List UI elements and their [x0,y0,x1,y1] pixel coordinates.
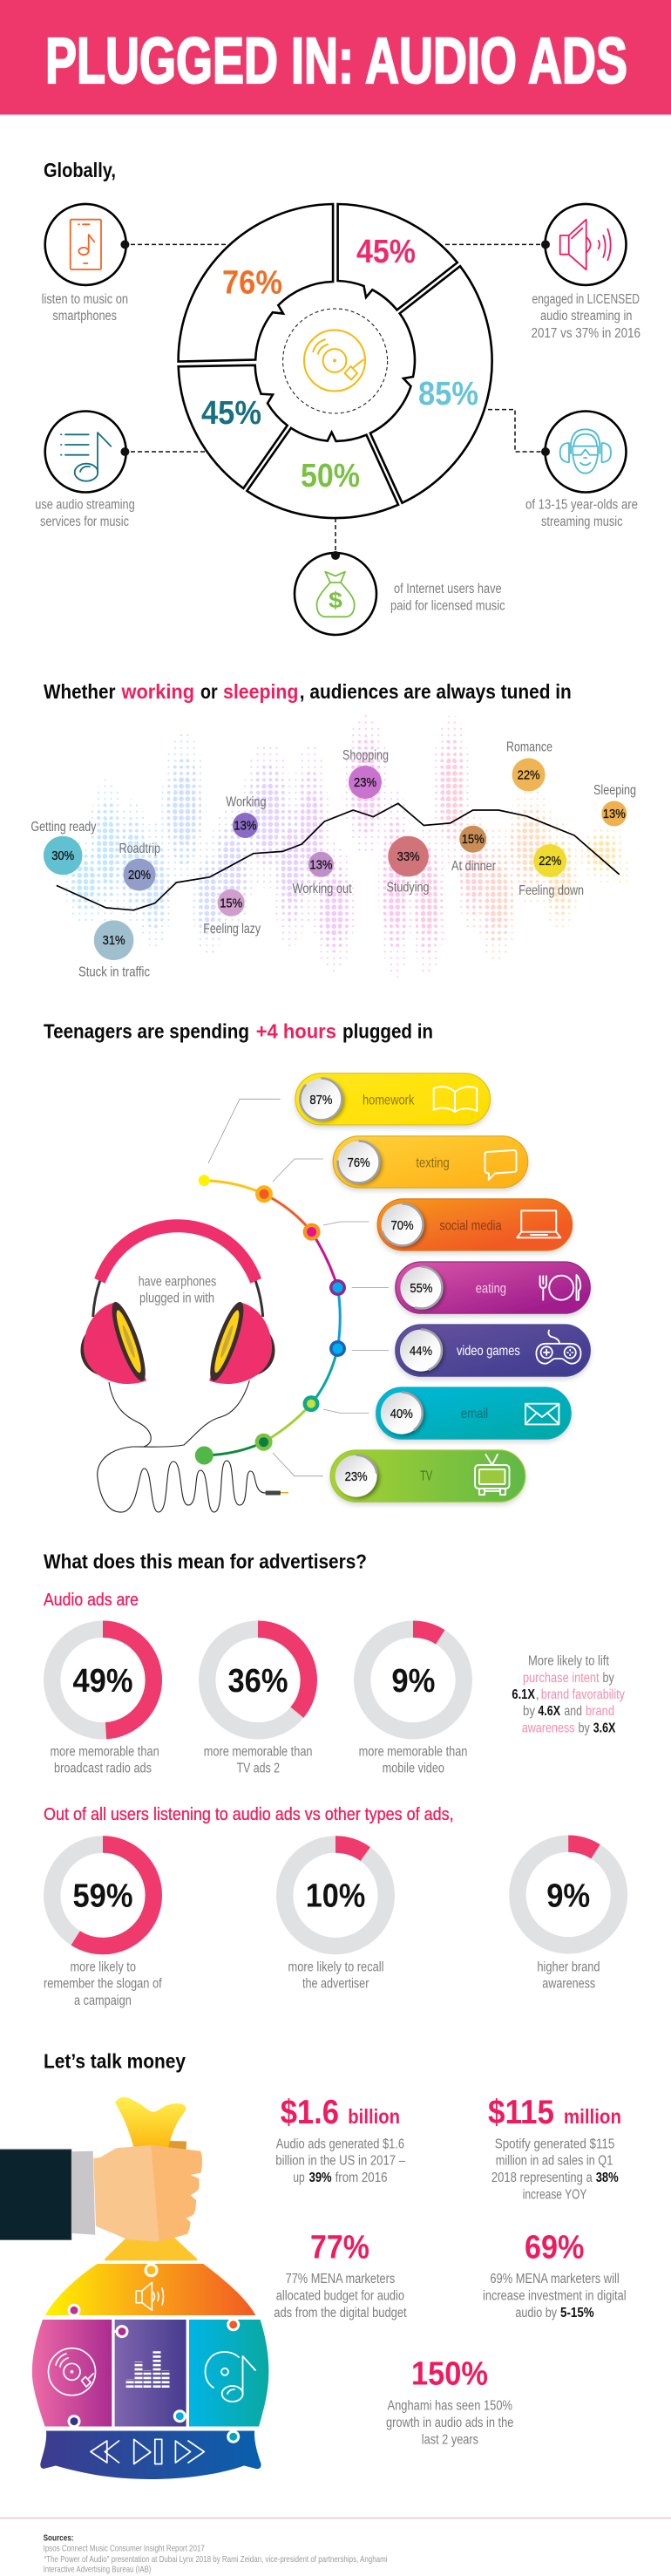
icon: face with headphones [541,412,626,492]
connector lines [131,244,546,555]
icon: speech bubble [485,1150,516,1180]
caption: awareness [542,1977,595,1992]
point: roadtrip 20%: 20% [128,869,151,883]
heading: working or sleeping: Whether [44,680,116,703]
value: 45% pink: 45% [356,234,416,270]
caption: more memorable than [51,1744,159,1759]
point: at dinner 15% [451,826,497,874]
subheading: out of all users: Out of all users listening to audio ads vs other types of ads, [44,1804,454,1824]
caption [537,1960,600,1992]
body text: Anghami has seen 150% [387,2399,512,2414]
caption: more likely to [70,1960,136,1975]
point: working 13%: Working [226,795,267,810]
icon: playlist note [45,412,129,492]
leader lines [208,1099,389,1476]
caption [139,1274,217,1305]
stat: smartphones [42,204,129,324]
stat: 77%: 77% [310,2229,369,2266]
icon: money bag [295,551,376,635]
caption: of 13-15 year-olds are [525,498,638,513]
caption: engaged in LICENSED [532,292,640,307]
callout: purchase intent: 3.6X [593,1721,616,1735]
point: stuck in traffic 31%: 31% [103,934,125,948]
point: romance 22% [506,740,552,791]
point: shopping 23%: 23% [354,776,376,790]
sleeve [0,2150,71,2239]
stat: 69%: 69% [525,2229,584,2266]
body text: 38% [596,2171,619,2185]
point: feeling lazy 15%: Feeling lazy [203,922,261,937]
nodes [195,1175,346,1465]
icon: open book [434,1087,477,1112]
cable [98,1380,265,1512]
icon: laptop [517,1210,560,1237]
body text: from 2016 [336,2171,387,2185]
donut: 10%: 10% [306,1878,365,1915]
heading: working or sleeping: working [121,680,194,703]
callout: purchase intent: by [579,1721,590,1735]
point: stuck in traffic 31% [78,920,150,980]
body text: audio by [515,2306,557,2320]
pill: homework [295,1073,490,1125]
body text: million in ad sales in Q1 [496,2154,613,2168]
pill: texting [333,1136,528,1188]
point: working out 13%: Working out [293,882,352,896]
puzzle piece: speaker [45,2264,255,2315]
stat: $1.6 billion: billion [348,2105,400,2128]
point: sleeping 13%: Sleeping [593,783,636,798]
subheading: audio ads are: Audio ads are [44,1590,139,1610]
caption: paid for licensed music [390,598,505,613]
caption: remember the slogan of [44,1977,162,1992]
body text: billion in the US in 2017 – [275,2154,405,2168]
point: feeling down 22%: 22% [539,855,561,869]
stat: 150% [386,2355,513,2447]
point: working 13%: 13% [234,820,256,834]
trend line [57,803,620,910]
callout: purchase intent: , [535,1687,539,1702]
icon: game controller [536,1331,580,1364]
pill: social media [377,1199,573,1251]
body text [491,2136,619,2202]
callout: purchase intent [512,1653,625,1735]
pill: homework: homework [363,1093,415,1107]
pill: email: email [461,1407,488,1421]
donut: 9% awareness [518,1843,620,1992]
pill: video games: 44% [410,1345,432,1359]
stat: $115 million: million [564,2105,621,2128]
caption [51,1744,159,1775]
puzzle connectors [69,2305,239,2442]
caption: a campaign [74,1993,132,2008]
heading: teenagers [44,1020,433,1043]
point: studying 33%: Studying [387,880,429,895]
body text [275,2136,405,2185]
value: 76%: 76% [222,265,282,302]
callout: purchase intent: More likely to lift [528,1653,610,1668]
puzzle piece: playback controls [40,2431,261,2479]
stat: $1.6 billion [275,2094,405,2185]
body text: ads from the digital budget [274,2306,407,2320]
body text: growth in audio ads in the [386,2416,513,2430]
caption: TV ads 2 [237,1762,280,1775]
heading: money: Let’s talk money [44,2049,186,2072]
callout: purchase intent: awareness [522,1721,575,1735]
body text [386,2399,513,2447]
caption [44,1960,162,2008]
caption [288,1960,383,1992]
pill: social media: 70% [390,1219,414,1233]
point: at dinner 15%: At dinner [451,859,497,874]
caption [35,498,135,529]
caption [42,292,128,324]
body text: 69% MENA marketers will [490,2272,620,2286]
value: 50%: 50% [301,458,360,494]
caption: more memorable than [204,1744,312,1759]
point: working 13% [226,795,267,838]
pill: texting: texting [416,1156,450,1171]
illustration: headphones [81,1219,288,1512]
sources: Interactive Advertising Bureau (IAB) [44,2565,151,2575]
dashed inner ring [283,309,388,413]
segment: 50% green [247,428,398,518]
pill: TV [330,1450,525,1502]
point: working out 13%: 13% [309,858,332,872]
pill: eating: 55% [410,1282,432,1296]
point: getting ready 30%: Getting ready [30,820,96,835]
bag neck [105,2097,197,2260]
stat: 69% [483,2229,627,2320]
puzzle piece: vinyl [32,2320,112,2426]
donut: 9% awareness: 9% [546,1878,590,1915]
point: sleeping 13%: 13% [603,808,626,821]
caption: smartphones [52,309,117,324]
callout: purchase intent: 4.6X [538,1704,561,1719]
halftone sound wave background [64,715,631,978]
point: getting ready 30%: 30% [51,849,74,863]
caption: more likely to recall [288,1960,383,1975]
pill: eating [396,1262,590,1313]
point: romance 22%: Romance [506,740,552,755]
body text: increase YOY [523,2187,586,2202]
body text: increase investment in digital [483,2289,627,2304]
caption [525,498,638,529]
pill: social media: social media [439,1219,502,1234]
stat: $115 million [488,2094,621,2202]
heading: Globally: Globally, [44,159,116,181]
jack plug [265,1491,288,1495]
caption: streaming music [541,515,623,529]
donut: 49%: 49% [73,1663,132,1700]
body text: Audio ads generated $1.6 [276,2136,404,2151]
callout: purchase intent: brand favorability [541,1687,625,1702]
point: feeling down 22%: Feeling down [518,883,584,898]
caption [204,1744,312,1775]
left ear cup [81,1298,152,1384]
body text: Spotify generated $115 [495,2136,614,2151]
sources [44,2533,387,2575]
point: getting ready 30% [30,820,96,875]
caption: broadcast radio ads [54,1762,152,1775]
pill: eating: eating [476,1282,506,1297]
point: feeling lazy 15% [203,889,261,937]
donut: 9% [359,1629,467,1775]
heading: working or sleeping: sleeping [223,680,298,703]
icon: speaker [541,204,626,285]
icon: envelope [525,1404,559,1424]
headband [94,1219,261,1284]
value: 85%: 85% [418,376,478,412]
stat: 77% [274,2229,407,2320]
caption [390,582,505,613]
caption: the advertiser [302,1977,369,1992]
point: roadtrip 20%: Roadtrip [119,842,160,856]
point: feeling down 22% [518,844,584,898]
heading: working or sleeping: or [200,680,218,703]
sources: Sources: [44,2533,73,2544]
pill: email [376,1387,571,1439]
body text [274,2272,407,2320]
value: 45% teal: 45% [201,395,261,432]
caption: more memorable than [359,1744,467,1759]
donut: 59%: 59% [73,1878,132,1915]
hand [93,2145,202,2242]
point: stuck in traffic 31%: Stuck in traffic [78,964,150,980]
callout: purchase intent: purchase intent [523,1671,600,1686]
donut: 49% [51,1629,159,1775]
point: shopping 23% [342,748,389,799]
pill: homework: 87% [309,1094,332,1107]
sources: “The Power of Audio” presentation at Dubai Lynx 2018 by Rami Zeidan, vice-president of partnerships, Anghami [44,2554,387,2565]
illustration: hand holding audio money bag [0,2097,268,2479]
donut: 36% [204,1629,312,1775]
heading: teenagers: +4 hours [256,1020,336,1043]
stat: paid for music [295,551,505,635]
segment: 45% pink [338,204,458,310]
point: at dinner 15%: 15% [462,833,485,847]
cuff [72,2151,95,2235]
icon: vinyl record [304,330,365,391]
icon: television [475,1455,509,1495]
headband wires [93,1280,263,1317]
sources: Ipsos Connect Music Consumer Insight Report 2017 [44,2544,205,2554]
caption [532,292,640,341]
heading: teenagers: Teenagers are spending [44,1020,249,1043]
pill: TV: TV [420,1469,432,1484]
callout: purchase intent: brand [586,1704,614,1719]
pill: texting: 76% [348,1156,370,1170]
stat: teens streaming [525,412,638,529]
pill: TV: 23% [345,1470,368,1484]
pill: video games: video games [457,1344,520,1359]
body text: 39% [309,2171,332,2185]
callout: purchase intent: by [523,1704,535,1719]
heading: working or sleeping: , audiences are always tuned in [300,680,572,703]
caption [359,1744,467,1775]
donut: 9%: 9% [391,1663,435,1700]
stat: licensed streaming [532,204,640,341]
callout: purchase intent: by [603,1671,614,1686]
icon: phone with note [45,204,129,285]
stat: streaming services [35,412,135,529]
pill: email: 40% [390,1407,413,1421]
body text: up [293,2171,305,2185]
header banner [0,0,671,115]
puzzle piece: equalizer [115,2320,186,2426]
caption: plugged in with [139,1291,214,1305]
timeline arc [195,1099,389,1476]
body text: 77% MENA marketers [286,2272,396,2286]
chart: listening moments [30,715,636,980]
stat: $1.6 billion: $1.6 [281,2094,339,2131]
caption: 2017 vs 37% in 2016 [532,326,640,341]
segment: 76% orange [179,204,333,362]
caption: services for music [40,515,129,529]
body text [483,2272,627,2320]
right ear cup [204,1298,274,1384]
caption: mobile video [383,1762,444,1775]
point: shopping 23%: Shopping [342,748,389,763]
point: working out 13% [293,852,352,896]
segment: 45% teal [179,365,288,488]
caption: of Internet users have [394,582,502,596]
caption: use audio streaming [35,498,135,513]
point: sleeping 13% [593,783,636,827]
point: studying 33%: 33% [397,850,420,864]
heading: advertisers: What does this mean for advertisers? [44,1550,367,1572]
icon: money bag: $ [329,587,343,613]
donut: 10% [285,1844,386,1992]
donut: 59% [44,1844,162,2008]
point: feeling lazy 15%: 15% [220,896,242,910]
donut: 36%: 36% [228,1663,288,1700]
callout: purchase intent: and [564,1704,582,1719]
stat: $115 million: $115 [488,2094,554,2131]
wheel diagram [179,204,492,518]
caption: listen to music on [42,292,128,307]
body text: last 2 years [422,2432,478,2447]
body text: 2018 representing a [491,2171,593,2185]
point: studying 33% [387,836,429,895]
icon: plate and cutlery [540,1275,580,1300]
heading: teenagers: plugged in [342,1020,433,1043]
point: romance 22%: 22% [518,768,540,782]
caption: higher brand [537,1960,600,1975]
pill: video games [396,1325,590,1376]
body text: allocated budget for audio [276,2289,404,2304]
stat: 150%: 150% [411,2355,488,2392]
point: roadtrip 20% [119,842,160,891]
heading: working or sleeping [44,680,572,703]
puzzle piece: music disc [189,2320,268,2426]
callout: purchase intent: 6.1X [512,1687,536,1702]
caption: audio streaming in [540,309,633,324]
caption: have earphones [139,1274,217,1289]
segment: 85% blue [370,266,492,503]
body text: 5-15% [560,2306,594,2320]
